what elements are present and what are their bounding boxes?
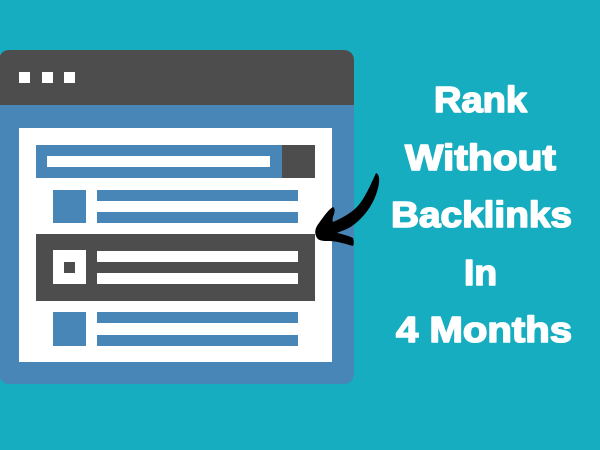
highlighted result item [36,234,315,301]
window body [0,50,354,384]
search bar [36,145,315,178]
window control buttons [19,72,75,83]
browser window illustration [0,50,354,384]
result item 3 [53,312,298,346]
page area [19,128,332,362]
result item 1 [53,190,298,223]
arrow [315,173,379,246]
title bar [0,50,354,105]
line: Rank: Rank [434,79,528,120]
line: In: In [464,252,497,293]
headline text [391,79,572,350]
line: 4 Months: 4 Months [396,309,572,350]
line: Without: Without [405,137,556,178]
line: Backlinks: Backlinks [391,194,572,235]
